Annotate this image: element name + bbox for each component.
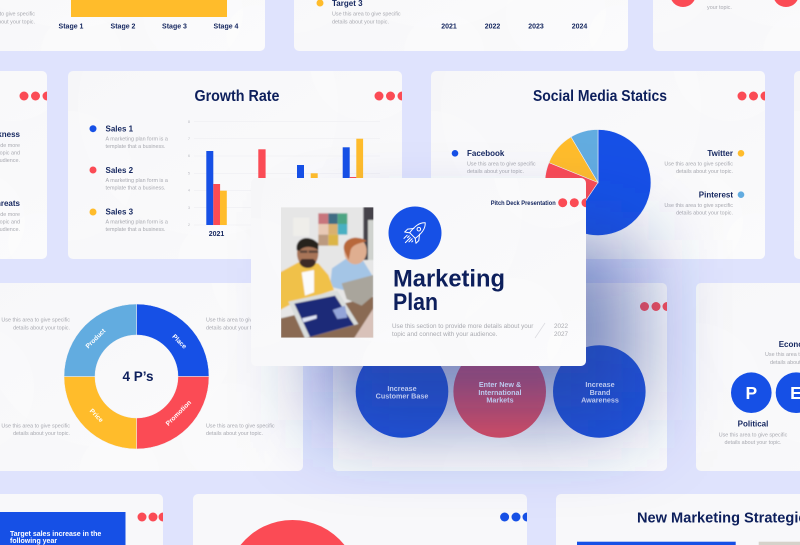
legend: twitter bbox=[664, 149, 744, 175]
panel: social media statics bbox=[366, 0, 789, 301]
economic text bbox=[765, 340, 800, 366]
legend: pinterest bbox=[664, 190, 744, 216]
legend: facebook: Facebook bbox=[467, 149, 505, 158]
dots bbox=[374, 92, 402, 100]
donut chart bbox=[64, 304, 209, 449]
political text: details about your topic. bbox=[725, 440, 781, 446]
label: increase customer base: Increase bbox=[387, 384, 417, 393]
panel: right edge partial bbox=[729, 0, 800, 301]
donut labels bbox=[85, 327, 193, 428]
years bbox=[554, 323, 568, 338]
note: top left: Use this area to give specific bbox=[1, 318, 70, 324]
description: Use this section to provide more details about your bbox=[392, 323, 533, 330]
note: bottom left bbox=[1, 424, 70, 437]
bar chart: 8 bbox=[188, 120, 190, 124]
panel: goals circles bbox=[268, 188, 691, 513]
year labels bbox=[441, 24, 587, 30]
panel: SWOT (left partial) bbox=[0, 0, 71, 301]
heading: Growth Rate bbox=[194, 88, 280, 105]
label: increase customer base: Customer Base bbox=[376, 392, 428, 400]
year labels: 2021 bbox=[441, 24, 457, 30]
heading: Social Media Statics bbox=[533, 88, 667, 105]
years: 2027 bbox=[554, 331, 568, 338]
note: bottom left: Use this area to give specific bbox=[1, 424, 70, 430]
note: top right: details about your topic. bbox=[206, 326, 263, 332]
bar chart: 6 bbox=[188, 154, 190, 158]
side description bbox=[0, 12, 35, 26]
side text: your topic. bbox=[707, 5, 732, 11]
panel: sales target (bottom left) bbox=[0, 494, 163, 545]
political text: Use this area to give specific bbox=[719, 432, 788, 438]
bar chart: 3 bbox=[188, 206, 190, 210]
label: increase customer base bbox=[376, 384, 428, 400]
label: increase brand awareness bbox=[581, 380, 619, 404]
panel: 4 P's donut bbox=[0, 188, 327, 513]
legend: sales 3: template that a business. bbox=[106, 227, 165, 233]
note: bottom right: details about your topic. bbox=[206, 431, 263, 437]
donut labels: Place bbox=[170, 333, 188, 351]
legend: target 3 bbox=[316, 0, 401, 26]
legend: twitter: Use this area to give specific bbox=[664, 162, 733, 168]
stage labels: Stage 3 bbox=[162, 24, 187, 30]
dots bbox=[20, 92, 47, 100]
legend: sales 2: A marketing plan form is a bbox=[106, 178, 168, 184]
note: top right: Use this area to give specific bbox=[206, 318, 275, 324]
note: bottom right bbox=[206, 424, 275, 437]
circle labels bbox=[376, 380, 619, 404]
card drop shadow glow bbox=[325, 240, 635, 420]
panel: PEST bbox=[631, 188, 800, 513]
label: enter new markets: International bbox=[478, 388, 522, 397]
weakness text bbox=[0, 130, 21, 164]
panel: funnel stages (top left) bbox=[0, 0, 289, 93]
year labels: 2024 bbox=[572, 24, 587, 30]
legend: twitter: Twitter bbox=[707, 149, 733, 158]
legend: sales 1: A marketing plan form is a bbox=[106, 136, 168, 142]
label: increase brand awareness: Brand bbox=[590, 388, 610, 397]
bar chart: 4 bbox=[188, 188, 190, 192]
legend: target 3: details about your topic. bbox=[332, 20, 389, 26]
donut labels: Promotion bbox=[165, 399, 193, 428]
year labels: 2022 bbox=[485, 24, 500, 30]
legend: facebook bbox=[452, 149, 536, 175]
label: increase brand awareness: Increase bbox=[585, 380, 615, 389]
title bbox=[393, 266, 505, 316]
note: top right bbox=[206, 318, 275, 332]
bar chart: 2021 bbox=[209, 231, 224, 238]
legend: sales 2 bbox=[90, 166, 168, 192]
label: enter new markets: Enter New & bbox=[479, 380, 521, 389]
bar chart bbox=[188, 120, 380, 238]
legend: facebook: details about your topic. bbox=[467, 169, 524, 175]
panel: red circle (bottom middle) bbox=[193, 494, 527, 545]
legend: sales 3 bbox=[90, 208, 168, 233]
dots bbox=[738, 92, 765, 100]
legend: sales 1: template that a business. bbox=[106, 144, 165, 150]
circle: enter new markets bbox=[453, 345, 546, 438]
political text: Political bbox=[738, 420, 768, 428]
circle: economic bbox=[776, 372, 800, 413]
panel: new marketing strategies bbox=[556, 494, 800, 545]
donut labels: Price bbox=[88, 408, 104, 424]
title: Marketing bbox=[393, 266, 505, 292]
donut labels: Product bbox=[85, 327, 108, 350]
panel: targets (top middle) bbox=[229, 0, 652, 93]
photo strip bbox=[759, 542, 800, 545]
note: top left bbox=[1, 318, 70, 332]
year labels: 2023 bbox=[528, 24, 544, 30]
callout text bbox=[10, 531, 101, 545]
label: enter new markets bbox=[478, 380, 522, 404]
circle: political bbox=[731, 372, 772, 413]
threats text bbox=[0, 199, 21, 233]
callout text: Target sales increase in the bbox=[10, 531, 101, 538]
legend: twitter: details about your topic. bbox=[676, 169, 733, 175]
main card: marketing plan bbox=[251, 178, 586, 366]
dots bbox=[500, 512, 527, 522]
years: 2022 bbox=[554, 323, 568, 330]
note: top left: details about your topic. bbox=[13, 326, 70, 332]
legend: facebook: Use this area to give specific bbox=[467, 162, 536, 168]
legend: sales 2: Sales 2 bbox=[106, 166, 134, 175]
icon: rocket bbox=[388, 206, 442, 260]
description: topic and connect with your audience. bbox=[392, 331, 498, 338]
political text bbox=[719, 420, 788, 446]
legend: pinterest: details about your topic. bbox=[676, 210, 733, 216]
description bbox=[392, 323, 533, 338]
blue callout bbox=[0, 512, 126, 545]
bar chart: 7 bbox=[188, 137, 190, 141]
red circles bbox=[670, 0, 799, 7]
pie chart bbox=[545, 130, 651, 236]
circle: increase customer base bbox=[356, 345, 448, 438]
label: enter new markets: Markets bbox=[486, 395, 514, 404]
legend: target 3: Use this area to give specific bbox=[332, 12, 401, 18]
photo: two men at laptops bbox=[278, 205, 377, 340]
panel: growth rate bbox=[3, 0, 426, 301]
bar chart: 2 bbox=[188, 223, 190, 227]
legend: sales 1 bbox=[90, 124, 168, 150]
dots bbox=[138, 512, 163, 522]
callout text: following year bbox=[10, 538, 57, 545]
stage labels: Stage 2 bbox=[111, 24, 136, 30]
circle: political: P bbox=[745, 383, 757, 403]
dots bbox=[558, 198, 586, 207]
legend: sales 3: A marketing plan form is a bbox=[106, 220, 168, 226]
legend: sales 2: template that a business. bbox=[106, 186, 165, 192]
stage labels bbox=[59, 24, 239, 30]
legend: sales 3: Sales 3 bbox=[106, 208, 134, 216]
pitch deck label: Pitch Deck Presentation bbox=[491, 200, 556, 207]
dots bbox=[640, 302, 667, 311]
legend: sales 1: Sales 1 bbox=[106, 124, 134, 134]
legend: pinterest: Use this area to give specific bbox=[664, 203, 733, 209]
stage labels: Stage 1 bbox=[59, 24, 84, 30]
panel: circles (top right) bbox=[588, 0, 800, 93]
circle: increase brand awareness bbox=[553, 345, 646, 438]
stage labels: Stage 4 bbox=[214, 24, 239, 30]
donut centre label: 4 P’s bbox=[122, 369, 154, 384]
note: bottom right: Use this area to give specific bbox=[206, 424, 275, 430]
legend: pinterest: Pinterest bbox=[699, 190, 733, 200]
stage bar bbox=[71, 0, 227, 17]
blue block bbox=[577, 542, 736, 545]
label: increase brand awareness: Awareness bbox=[581, 395, 619, 404]
note: bottom left: details about your topic. bbox=[13, 431, 70, 437]
title: Plan bbox=[393, 289, 438, 316]
divider slash bbox=[535, 323, 545, 338]
bar chart: 5 bbox=[188, 172, 190, 176]
red circle bbox=[240, 520, 344, 545]
